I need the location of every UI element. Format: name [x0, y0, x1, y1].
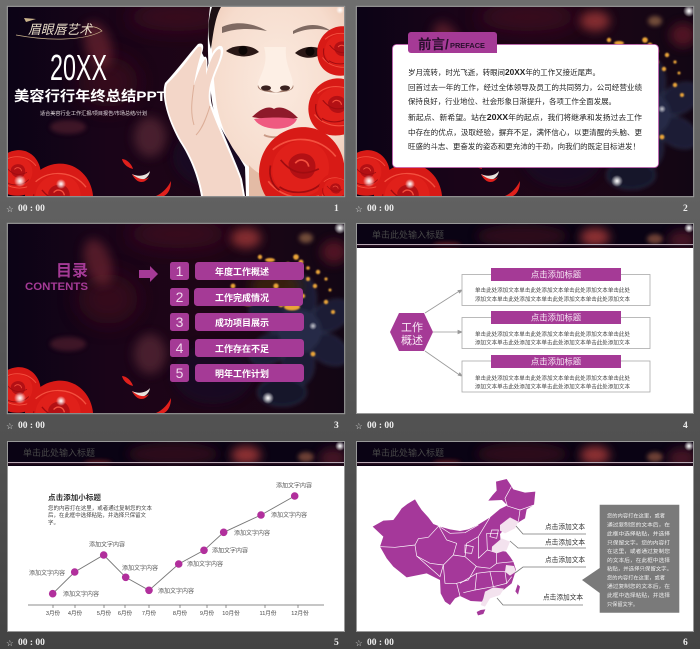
- subheading: 点击添加小标题: [48, 492, 102, 502]
- callout lines: [497, 526, 586, 605]
- preface body text: [408, 68, 642, 151]
- grey side panel: 只保留文字。您的内容打: [607, 538, 671, 546]
- line chart: 9月份: [200, 609, 215, 617]
- grey side panel: 通过复制您的文本后，在: [607, 520, 670, 528]
- preface body text: 保持良好，行业地位、社会形象日渐提升，各项工作全面发展。: [408, 97, 616, 106]
- line chart: 10月份: [222, 609, 240, 617]
- line chart: 添加文字内容: [158, 587, 194, 595]
- line chart: 8月份: [173, 609, 188, 617]
- footer 2: [355, 204, 688, 215]
- box 3: 添加文本单击此处添加文本单击此处添加文本单击此处添加文本: [475, 382, 630, 390]
- subtitle: 适合美容行业工作汇报/项目报告/市场总结/计划: [40, 110, 147, 117]
- preface tab: PREFACE: [450, 41, 485, 50]
- logo: [16, 18, 102, 39]
- slide 3: contents: [6, 222, 346, 414]
- grey side panel: 您的内容打在这里，或者: [607, 512, 665, 520]
- footer 3: 00 : 00: [18, 421, 45, 431]
- footer 4: [355, 421, 688, 432]
- footer 1: 00 : 00: [18, 204, 45, 214]
- footer 5: 00 : 00: [18, 638, 45, 648]
- contents heading: [25, 262, 88, 293]
- grey side panel: 您的内容打在这里，或者: [607, 574, 665, 582]
- grey side panel: 通过复制您的文本后，在: [607, 582, 670, 590]
- footer 5: [6, 638, 339, 649]
- line chart: 添加文字内容: [234, 529, 270, 537]
- map labels: 点击添加文本: [543, 592, 583, 602]
- contents heading: CONTENTS: [25, 281, 88, 293]
- contents heading: 目录: [56, 262, 88, 280]
- title bar: [357, 442, 693, 466]
- year 20XX: 20XX: [50, 47, 107, 88]
- line chart: 3月份: [46, 609, 61, 617]
- line chart: 11月份: [260, 609, 277, 617]
- slide 1: cover: [6, 6, 346, 198]
- line chart: 添加文字内容: [29, 569, 65, 577]
- highlighted provinces: [481, 517, 518, 607]
- box 1: [462, 268, 650, 306]
- contents list: 工作存在不足: [215, 343, 269, 354]
- map of China: [373, 479, 535, 615]
- logo: 眉眼唇艺术: [28, 22, 93, 37]
- map labels: 点击添加文本: [545, 555, 585, 564]
- line chart: 添加文字内容: [276, 482, 312, 490]
- footer 5: ☆: [6, 639, 14, 649]
- contents list: 4: [176, 340, 184, 356]
- title bar: [8, 442, 344, 466]
- description: 后，在此框中选择粘贴，并选择只保留文: [48, 511, 146, 519]
- line chart: 添加文字内容: [212, 546, 248, 554]
- title bar: 单击此处输入标题: [23, 447, 95, 458]
- preface body text: 中存在的优点，汲取经验，摒弃不足，满怀信心，以更清醒的头脑、更: [408, 128, 642, 137]
- title bar: 单击此处输入标题: [372, 229, 444, 240]
- line chart: [28, 482, 324, 617]
- footer 4: 4: [683, 421, 688, 431]
- preface card: [392, 32, 658, 168]
- title bar: 单击此处输入标题: [372, 447, 444, 458]
- line chart: 添加文字内容: [271, 511, 307, 519]
- hexagon: [390, 313, 433, 351]
- footer 1: [6, 204, 339, 215]
- slide 6: map: [356, 441, 696, 632]
- footer 6: ☆: [355, 639, 363, 649]
- footer 2: 00 : 00: [367, 204, 394, 214]
- hexagon: 工作: [401, 321, 423, 334]
- title bar: [357, 224, 693, 248]
- footer 6: 00 : 00: [367, 638, 394, 648]
- preface tab: [408, 32, 497, 53]
- contents list: 工作完成情况: [215, 292, 269, 303]
- hexagon: 概述: [401, 334, 423, 347]
- box 3: 单击此处添加文本单击此处添加文本单击此处添加文本单击此处: [475, 374, 630, 382]
- description: 您的内容打在这里，或者通过复制您的文本: [48, 504, 152, 512]
- contents list: 5: [176, 365, 184, 381]
- line chart: 7月份: [142, 609, 157, 617]
- contents list: 成功项目展示: [215, 317, 269, 328]
- box 2: 点击添加标题: [531, 312, 582, 322]
- preface tab: 前言/: [418, 36, 449, 52]
- footer 6: [355, 638, 688, 649]
- preface body text: 回首过去一年的工作，经过全体领导及员工的共同努力，公司经营业绩: [408, 83, 642, 92]
- preface body text: 旺盛的斗志、更奋发的姿态和更充沛的干劲，向我们的既定目标进发！: [408, 142, 640, 151]
- map labels: 点击添加文本: [545, 538, 585, 546]
- footer 4: 00 : 00: [367, 421, 394, 431]
- footer 1: ☆: [6, 205, 14, 215]
- box 1: 点击添加标题: [531, 270, 582, 280]
- contents list: 2: [176, 289, 184, 305]
- line chart: 添加文字内容: [63, 590, 99, 598]
- line chart: 4月份: [68, 609, 83, 617]
- box 2: 添加文本单击此处添加文本单击此处添加文本单击此处添加文本: [475, 338, 630, 346]
- grey side panel: [582, 505, 679, 613]
- footer 3: 3: [334, 421, 339, 431]
- arrows: [425, 290, 462, 376]
- footer 3: [6, 421, 339, 432]
- line chart: 6月份: [118, 609, 133, 617]
- footer 4: ☆: [355, 422, 363, 432]
- footer 5: 5: [334, 638, 339, 648]
- map labels: 点击添加文本: [545, 522, 585, 531]
- grey side panel: 的文本后，在此框中选择: [607, 556, 671, 564]
- box 1: 添加文本单击此处添加文本单击此处添加文本单击此处添加文本: [475, 295, 630, 303]
- line chart: 添加文字内容: [122, 564, 158, 572]
- line chart: 12月份: [291, 609, 309, 617]
- description: [48, 504, 152, 526]
- contents list: 明年工作计划: [215, 368, 269, 379]
- contents list: 3: [176, 314, 184, 330]
- main title: 美容行行年终总结PPT: [14, 88, 166, 104]
- footer 2: 2: [683, 204, 688, 214]
- contents list: 1: [176, 263, 184, 279]
- footer 1: 1: [334, 204, 339, 214]
- box 2: 单击此处添加文本单击此处添加文本单击此处添加文本单击此处: [475, 330, 630, 338]
- grey side panel: 在这里，或者通过复制您: [607, 547, 670, 555]
- line chart: 5月份: [97, 609, 112, 617]
- grey side panel: 粘贴，并选择只保留文字。: [607, 564, 672, 572]
- line chart: 添加文字内容: [187, 560, 223, 568]
- slide 4: work overview: [356, 223, 696, 414]
- grey side panel: 只保留文字。: [607, 600, 638, 608]
- footer 2: ☆: [355, 205, 363, 215]
- photo: woman's face and hand: [164, 7, 344, 196]
- contents list: [170, 262, 304, 382]
- preface body text: 岁月流转，时光飞逝，转眼间 20XX年的工作又接近尾声。: [408, 68, 600, 77]
- box 2: [462, 311, 650, 348]
- grey side panel: 此框中选择粘贴，并选择: [607, 530, 671, 538]
- footer 3: ☆: [6, 422, 14, 432]
- line chart: 添加文字内容: [89, 540, 125, 548]
- arrow: [139, 266, 158, 282]
- footer 6: 6: [683, 638, 688, 648]
- map labels: [543, 522, 585, 602]
- description: 字。: [48, 518, 59, 526]
- slide 5: line chart: [8, 441, 347, 632]
- box 3: [462, 355, 650, 392]
- contents list: 年度工作概述: [215, 266, 269, 277]
- box 3: 点击添加标题: [531, 356, 582, 366]
- slide 2: preface: [356, 6, 694, 198]
- grey side panel: 此框中选择粘贴，并选择: [607, 591, 671, 599]
- box 1: 单击此处添加文本单击此处添加文本单击此处添加文本单击此处: [475, 286, 630, 294]
- preface body text: 新起点、新希望。站在 20XX 年的起点，我们将继承和发扬过去工作: [408, 113, 642, 122]
